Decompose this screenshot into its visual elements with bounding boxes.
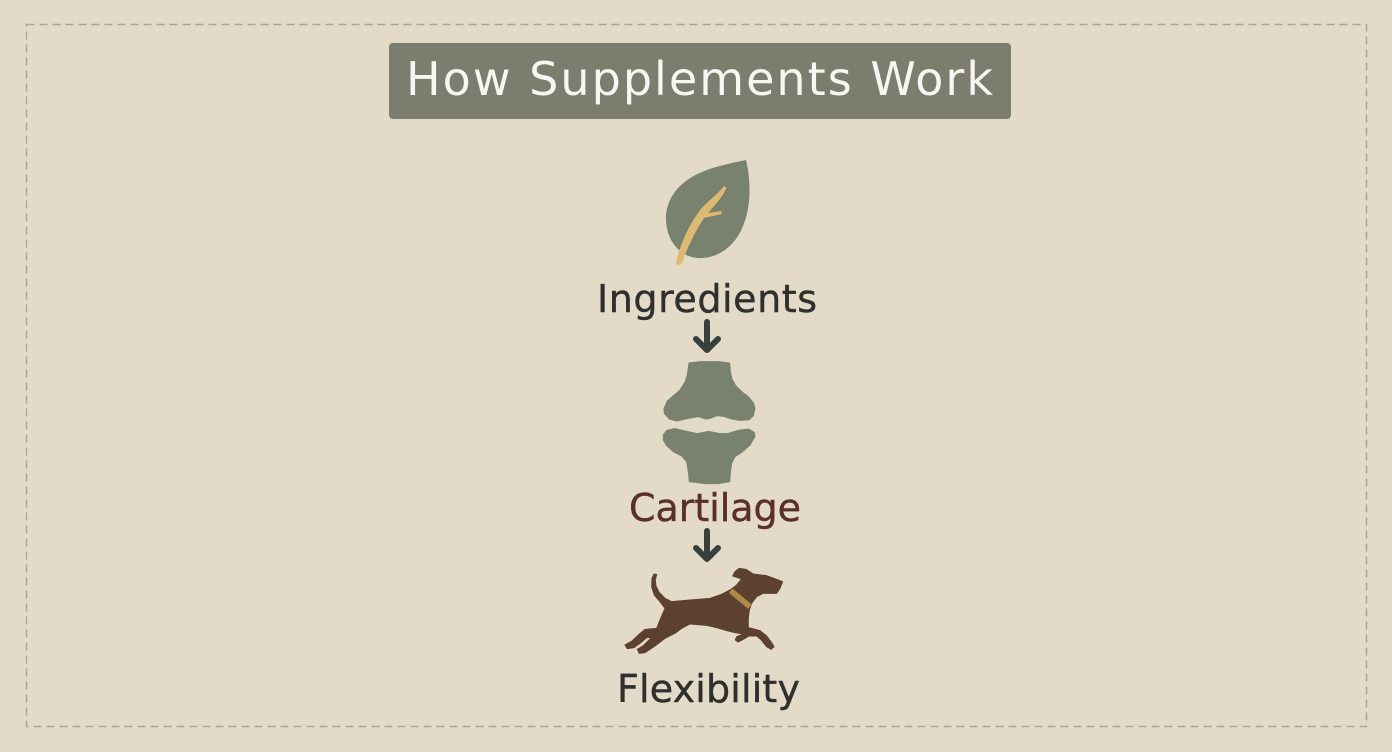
title banner: How Supplements Work	[406, 52, 993, 106]
upper bone	[664, 362, 755, 421]
lower bone	[663, 429, 755, 484]
icon: joint	[663, 362, 755, 484]
label: Ingredients: Ingredients	[597, 277, 817, 321]
icon: running dog	[625, 568, 783, 653]
dog collar	[731, 591, 750, 607]
arrow: cartilage to flexibility	[696, 531, 718, 559]
arrow: ingredients to cartilage	[696, 322, 718, 350]
label: Flexibility: Flexibility	[617, 667, 800, 711]
icon: leaf	[666, 160, 750, 265]
title banner	[389, 43, 1011, 119]
label: Cartilage: Cartilage	[629, 486, 801, 530]
